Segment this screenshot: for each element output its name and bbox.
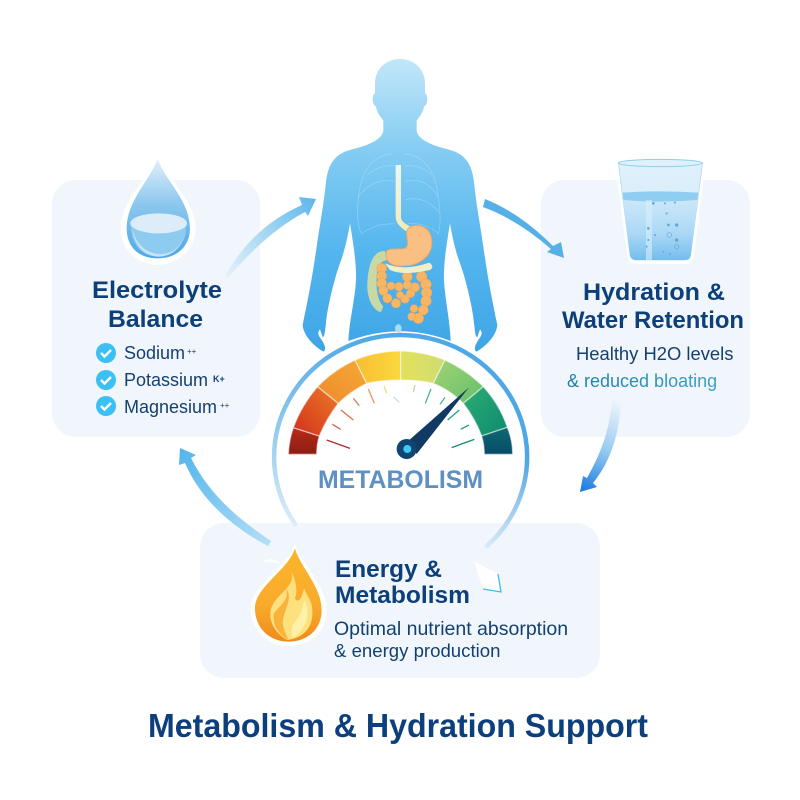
icon: water drop — [121, 153, 196, 265]
gauge colour segments — [288, 351, 513, 454]
panel: electrolyte background — [52, 180, 260, 437]
ion label: magnesium: ++ — [220, 401, 230, 410]
check icon: potassium — [96, 370, 116, 390]
arrow: body to hydration — [483, 199, 564, 258]
hydration text — [567, 343, 733, 391]
icon: water glass — [615, 158, 706, 264]
lungs outline — [357, 154, 440, 234]
arrow: electrolyte to body — [225, 197, 316, 278]
arrow: energy to electrolyte — [179, 448, 271, 546]
title: Metabolism & Hydration Support — [148, 707, 648, 744]
heading: electrolyte balance: Electrolyte — [92, 277, 222, 304]
energy text — [334, 618, 568, 661]
esophagus — [396, 165, 410, 232]
icon: flame — [251, 543, 327, 646]
small intestine — [367, 251, 387, 312]
energy text: & energy production — [334, 640, 500, 661]
list item: potassium: Potassium — [124, 370, 208, 390]
silhouette — [303, 59, 497, 352]
heading: energy and metabolism: Metabolism — [335, 582, 470, 609]
ion label: sodium: ++ — [187, 347, 197, 356]
heading: hydration and water retention — [562, 279, 744, 334]
check icon: sodium — [96, 343, 116, 363]
heading: electrolyte balance: Balance — [108, 306, 203, 333]
heading: energy and metabolism: Energy & — [335, 556, 442, 583]
gauge backdrop circle — [265, 333, 535, 587]
gauge ticks — [327, 385, 474, 448]
panel: hydration background — [541, 180, 750, 437]
energy text: Optimal nutrient absorption — [334, 618, 568, 640]
list item: magnesium: Magnesium — [124, 397, 217, 417]
needle hub — [397, 439, 417, 459]
stomach — [386, 225, 432, 266]
heading: electrolyte balance — [92, 277, 222, 333]
needle — [409, 387, 469, 454]
hydration text: & reduced bloating — [567, 371, 717, 391]
needle hub centre — [403, 445, 411, 453]
large intestine — [377, 263, 432, 324]
list item: sodium: Sodium — [124, 343, 185, 363]
pelvic highlight — [395, 324, 402, 332]
human body figure — [303, 59, 497, 352]
hydration text: Healthy H2O levels — [576, 343, 733, 364]
heading: hydration and water retention: Hydration & — [583, 279, 725, 306]
pancreas band — [385, 263, 432, 273]
gauge label: METABOLISM — [318, 466, 483, 494]
metabolism gauge — [288, 351, 513, 459]
heading: hydration and water retention: Water Retention — [562, 307, 744, 334]
panel: energy background — [200, 523, 600, 678]
electrolyte list — [96, 343, 230, 417]
gauge ring — [274, 335, 527, 546]
ion label: potassium: K+ — [213, 374, 225, 384]
heading: energy and metabolism — [335, 556, 470, 609]
check icon: magnesium — [96, 396, 116, 416]
arrow: hydration to energy — [580, 400, 621, 492]
arrow fragment in energy panel — [474, 561, 501, 592]
